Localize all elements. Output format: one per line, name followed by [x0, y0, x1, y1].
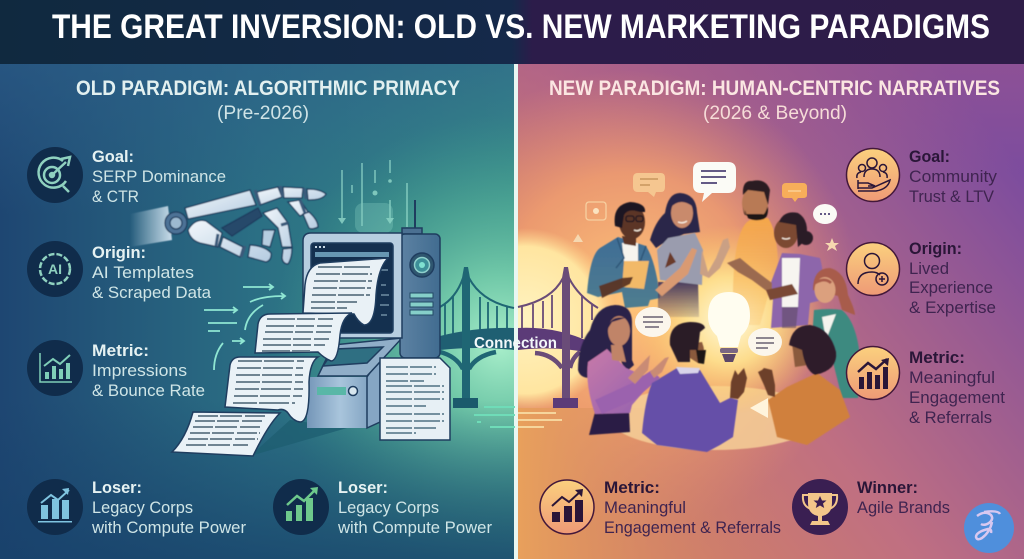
text: loser 2: Legacy Corps — [338, 498, 439, 517]
speech bubbles — [586, 162, 837, 356]
text: new origin: Origin: — [909, 239, 962, 258]
icon: chart (old metric) — [27, 340, 83, 396]
bridge: right half — [518, 267, 598, 427]
icon: community (goal) — [846, 148, 900, 202]
text: old metric: & Bounce Rate — [92, 381, 205, 400]
wrist joint — [165, 212, 187, 234]
text: winner: Agile Brands — [857, 498, 950, 517]
text: old metric: Metric: — [92, 341, 149, 360]
text: loser 1: with Compute Power — [91, 518, 246, 537]
bubble: dots — [813, 204, 837, 224]
title band — [0, 0, 1024, 64]
text: old goal: SERP Dominance — [92, 167, 226, 186]
speech bubble: left table — [635, 307, 671, 337]
bubble: tan — [633, 173, 665, 197]
text: old origin: AI Templates — [92, 263, 194, 282]
slot and knob — [317, 387, 346, 395]
text: new origin: Experience — [909, 278, 993, 297]
text: new goal — [909, 147, 998, 206]
text: old origin: Origin: — [92, 243, 146, 262]
illustration glow: light bulb halo — [634, 225, 824, 415]
text: old metric — [92, 341, 205, 400]
text: loser 1: Legacy Corps — [92, 498, 193, 517]
person: woman with long hair — [650, 193, 730, 317]
text: loser 2 — [337, 478, 492, 537]
icon: target (goal) — [27, 147, 83, 203]
text: old goal: Goal: — [92, 147, 134, 166]
logo badge — [964, 503, 1014, 553]
screen — [311, 243, 393, 333]
text: bottom metric — [604, 478, 781, 537]
icon: chart (loser 1) — [27, 479, 83, 535]
person: man seen from back — [642, 322, 747, 452]
text: loser 2: Loser: — [338, 478, 388, 497]
text: new origin: & Expertise — [909, 298, 996, 317]
heading: new paradigm: (2026 & Beyond) — [703, 103, 847, 124]
text: old goal — [92, 147, 226, 206]
light bulb — [708, 292, 750, 362]
icon: chart (bottom metric) — [540, 480, 594, 534]
robot arm — [130, 186, 326, 264]
document page — [380, 358, 450, 440]
text: new origin — [909, 239, 996, 317]
text: loser 1 — [91, 478, 246, 537]
paper sheet 4 — [172, 412, 280, 456]
text: new goal: Trust & LTV — [909, 187, 995, 206]
person: woman with bun — [727, 212, 823, 328]
text: old goal: & CTR — [92, 187, 139, 206]
text: winner — [857, 478, 950, 517]
paper sheet 3 — [225, 357, 318, 422]
heading: new paradigm — [549, 77, 1000, 124]
person: woman in teal jacket — [812, 268, 861, 398]
table — [610, 386, 820, 450]
text: new metric — [909, 348, 1005, 427]
paper sheet 2 — [255, 313, 352, 361]
slanted keyboard deck — [318, 338, 402, 376]
icon: AI gear (origin) — [27, 241, 83, 297]
text: loser 2: with Compute Power — [337, 518, 492, 537]
finger 3 — [263, 208, 292, 264]
text: loser 1: Loser: — [92, 478, 142, 497]
strut — [222, 208, 262, 236]
panel: old paradigm background — [0, 64, 515, 559]
person: man with glasses — [587, 202, 660, 308]
thumb — [188, 220, 271, 262]
heading: old paradigm: OLD PARADIGM: ALGORITHMIC PRIMACY — [76, 77, 460, 100]
text: bottom metric: Engagement & Referrals — [604, 518, 781, 537]
icon: AI gear (origin): AI — [48, 261, 62, 277]
icon: person with plus (origin) — [846, 242, 900, 296]
bridge label: connection: Connection — [474, 335, 557, 352]
person: woman seen from back — [758, 325, 850, 445]
vents — [410, 293, 433, 315]
text: old origin: & Scraped Data — [92, 283, 212, 302]
antenna — [414, 200, 416, 230]
table highlight — [750, 398, 768, 418]
text: new origin: Lived — [909, 259, 949, 278]
person: bearded man — [733, 180, 778, 325]
text: bottom metric: Meaningful — [604, 498, 686, 517]
text: new goal: Community — [909, 167, 998, 186]
heading: old paradigm — [76, 77, 460, 124]
icon: chart (loser 2) — [273, 479, 329, 535]
text: new goal: Goal: — [909, 147, 950, 166]
text: new metric: Metric: — [909, 348, 965, 367]
bubble: right table — [748, 328, 782, 356]
bridge: left half — [440, 267, 515, 427]
text: old metric: Impressions — [92, 361, 187, 380]
shadow — [250, 420, 347, 456]
text: new metric: Meaningful — [909, 368, 995, 387]
paper sheet 1 — [303, 258, 388, 325]
finger 1 — [257, 187, 326, 205]
monitor frame — [303, 233, 402, 338]
digital data rain — [338, 160, 407, 233]
finger 4 — [262, 230, 275, 247]
palm — [185, 190, 256, 219]
center divider — [514, 64, 518, 559]
heading: old paradigm: (Pre-2026) — [217, 103, 309, 124]
text: bottom metric: Metric: — [604, 478, 660, 497]
icon: chart (new metric) — [846, 346, 900, 400]
bubble: large white — [693, 162, 736, 202]
finger 2 — [288, 200, 318, 229]
bubble: orange — [782, 183, 807, 202]
panel: new paradigm background — [518, 64, 1024, 559]
text: old origin — [92, 243, 212, 302]
sparkles — [573, 234, 839, 251]
data stream arrows — [204, 284, 285, 370]
text: winner: Winner: — [857, 478, 918, 497]
base unit — [307, 377, 367, 428]
status lens — [410, 253, 434, 277]
person: seated woman — [578, 305, 669, 435]
text: new metric: Engagement — [909, 388, 1005, 407]
icon: trophy (winner) — [792, 479, 848, 535]
bubble: heart outline — [586, 202, 606, 220]
machine: document generator — [250, 200, 440, 456]
side column — [400, 234, 440, 358]
text: new metric: & Referrals — [909, 408, 992, 427]
